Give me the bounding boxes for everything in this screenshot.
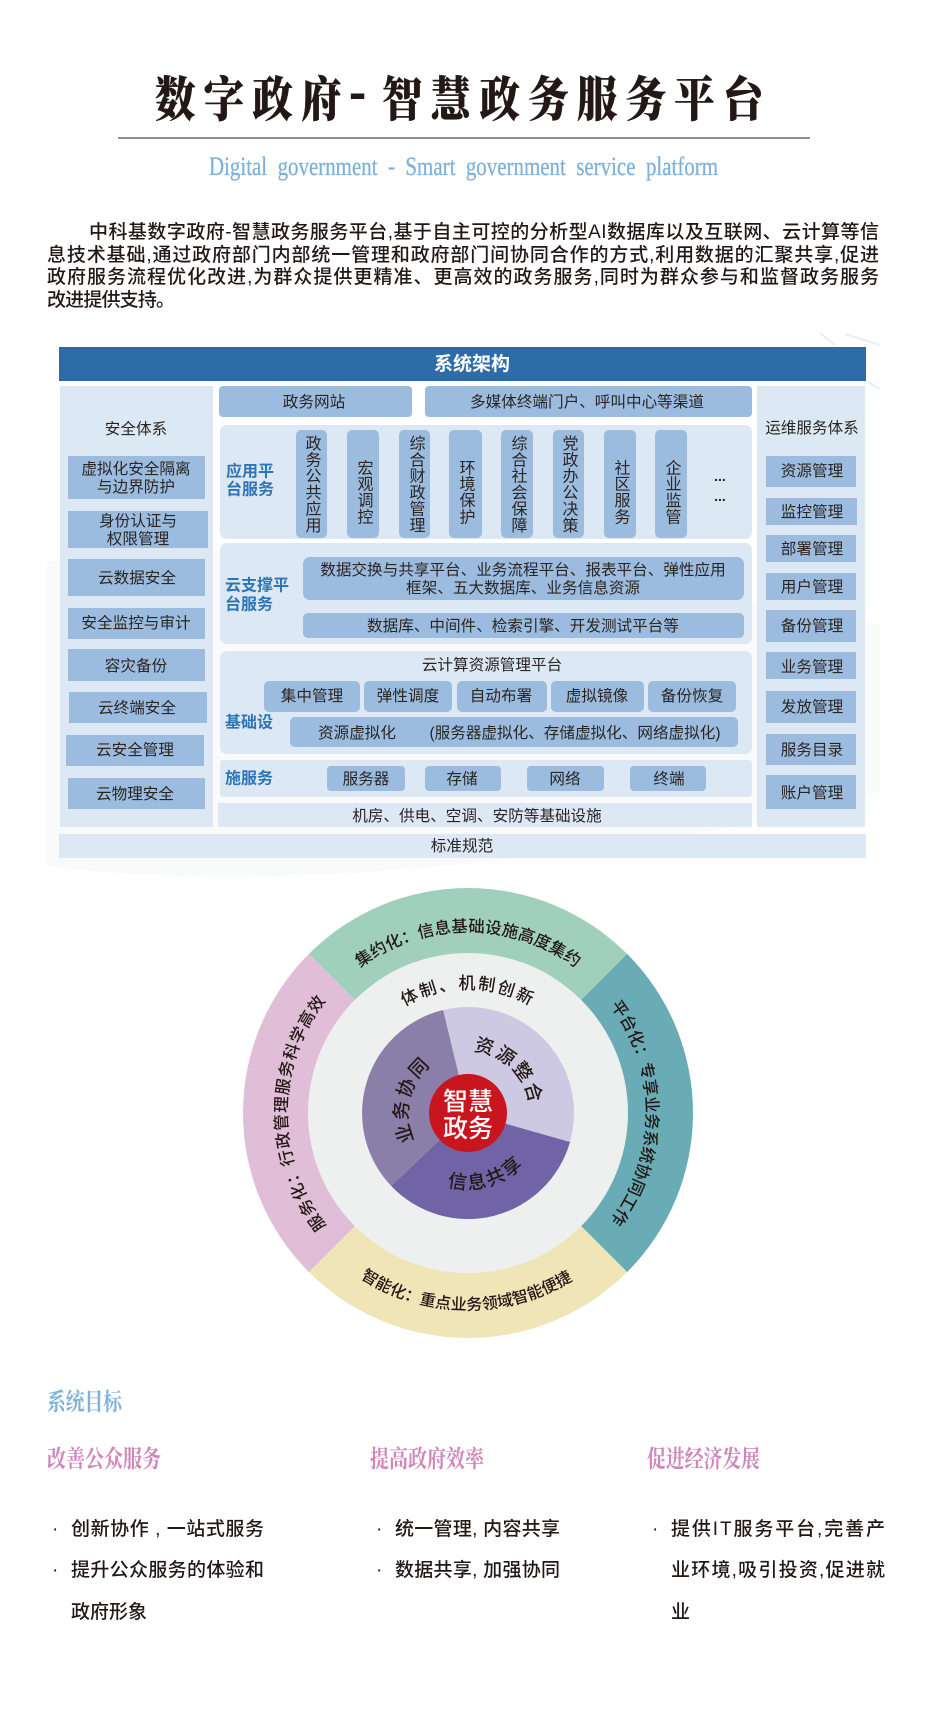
panel: operations services: 账户管理 [781,784,844,802]
panel: application platform services: ... [714,468,726,484]
panel: cloud support platform services: 框架、五大数据库、业务信息资源 [406,579,640,597]
panel: application platform services: 环境保护 [456,459,476,525]
sector: business collaboration: 业务协同 [392,1056,430,1143]
panel: infrastructure services: 自动布署 [470,687,532,705]
standards bar [59,834,866,858]
innovation ring: 体制、机制创新 [401,974,534,1006]
panel: operations services: 监控管理 [781,503,844,521]
column: improve public services: 政府形象 [71,1601,147,1623]
panel: infrastructure services: 网络 [549,769,581,788]
panel: infrastructure services: 服务器 [343,770,390,788]
intro paragraph: 中科基数字政府-智慧政务服务平台,基于自主可控的分析型AI数据库以及互联网、云计算等信 [89,221,879,243]
architecture header [59,347,866,381]
panel: operations services [757,386,865,827]
segment: platform: 平台化：专享业务系统协同工作 [612,999,660,1227]
panel: infrastructure services: 基础设 [225,714,273,732]
panel: application platform services: 台服务 [226,480,274,498]
panel: security system: 与边界防护 [97,478,175,496]
panel: security system: 云数据安全 [98,569,176,587]
innovation ring [308,953,628,1273]
standards bar: 标准规范 [431,837,493,855]
panel: operations services: 部署管理 [781,540,844,558]
panel: infrastructure services: 集中管理 [281,687,344,705]
panel: application platform services: 综合财政管理 [406,435,426,533]
column: improve public services: · [52,1560,58,1581]
column: improve public services: 创新协作 , 一站式服务 [71,1518,264,1540]
panel: application platform services: 综合社会保障 [508,435,528,533]
panel: infrastructure services [220,651,752,797]
panel: operations services: 业务管理 [781,658,844,676]
title: 数字政府 [155,61,350,130]
intro paragraph: 改进提供支持。 [47,289,175,311]
column: improve public services: 改善公众服务 [47,1439,161,1474]
segment: intensive [309,888,627,1000]
panel: application platform services: ... [714,488,726,504]
panel: security system: 云终端安全 [98,699,176,717]
segment: intelligent [309,1226,627,1338]
column: promote economic development: 业 [671,1601,690,1623]
intro paragraph: 政府服务流程优化改进,为群众提供更精准、更高效的政务服务,同时为群众参与和监督政务服务 [47,266,879,288]
column: improve government efficiency: 数据共享, 加强协同 [395,1559,560,1581]
title: 智慧政务服务平台 [382,61,772,130]
column: improve government efficiency: · [376,1560,382,1581]
segment: intensive: 集约化：信息基础设施高度集约 [355,918,581,968]
panel: system architecture [59,347,866,858]
panel: security system: 云物理安全 [96,785,174,803]
panel: application platform services [220,425,752,539]
panel: infrastructure services: 弹性调度 [377,687,439,705]
panel: security system [60,386,213,827]
panel: infrastructure services: 备份恢复 [661,687,724,705]
segment: service [243,954,355,1272]
panel: application platform services: 企业监管 [662,459,682,525]
heading: system goals: 系统目标 [47,1382,124,1417]
column: improve government efficiency: · [376,1519,382,1540]
column: promote economic development: 提供IT服务平台,完善产 [671,1518,885,1540]
centre circle: 政务 [443,1115,493,1143]
panel: operations services: 发放管理 [781,698,844,716]
panel: security system: 安全监控与审计 [81,614,191,632]
base facilities bar [218,803,752,827]
panel: security system: 云安全管理 [96,741,174,759]
column: promote economic development: 促进经济发展 [647,1439,760,1474]
column: improve government efficiency [370,1439,560,1581]
panel: operations services: 服务目录 [781,741,843,759]
intro paragraph [47,221,879,311]
panel: application platform services: 应用平 [226,462,274,480]
panel: infrastructure services: 存储 [446,770,478,788]
panel: security system: 容灾备份 [105,657,168,675]
column: improve public services: 提升公众服务的体验和 [71,1559,264,1581]
column: improve public services [47,1439,264,1623]
column: promote economic development [647,1439,885,1623]
centre circle: 智慧 [443,1088,493,1116]
column: promote economic development: 业环境,吸引投资,促进就 [671,1559,885,1581]
panel: application platform services: 社区服务 [612,459,630,525]
base facilities bar: 机房、供电、空调、安防等基础设施 [352,807,602,825]
panel: infrastructure services: 终端 [653,770,685,788]
sector: resource integration [443,1007,574,1142]
sector: information sharing [391,1124,570,1219]
panel: cloud support platform services: 云支撑平 [225,576,289,594]
panel: operations services: 备份管理 [781,617,844,635]
panel: infrastructure services: 虚拟镜像 [566,686,629,705]
title [155,55,772,130]
panel: operations services: 用户管理 [781,578,844,596]
centre circle [429,1074,507,1152]
panel: operations services: 运维服务体系 [765,419,859,437]
panel: application platform services: 政务公共应用 [302,435,322,534]
column: improve public services: · [52,1519,58,1540]
panel: cloud support platform services: 数据交换与共享平台、业务流程平台、报表平台、弹性应用 [320,560,726,579]
sector: information sharing: 信息共享 [449,1156,522,1191]
panel: security system: 虚拟化安全隔离 [81,460,191,478]
panel: operations services: 资源管理 [781,462,844,480]
panel: infrastructure services: 施服务 [225,768,273,788]
column: improve government efficiency: 统一管理, 内容共享 [395,1518,560,1540]
intro paragraph: 息技术基础,通过政府部门内部统一管理和政府部门间协同合作的方式,利用数据的汇聚共享,促进 [47,243,879,266]
panel: cloud support platform services: 台服务 [225,594,273,614]
channels row [219,386,752,417]
segment: intelligent: 智能化：重点业务领域智能便捷 [362,1268,573,1312]
panel: application platform services: 宏观调控 [354,459,374,525]
title: - [350,55,382,124]
panel: security system: 身份认证与 [99,512,177,530]
panel: cloud support platform services: 数据库、中间件、检索引擎、开发测试平台等 [367,617,679,635]
panel: security system: 权限管理 [107,530,170,548]
sector: business collaboration [362,1010,459,1186]
column: improve government efficiency: 提高政府效率 [370,1439,485,1474]
subtitle: Digital government - Smart government service platform [209,152,718,181]
panel: application platform services: 党政办公决策 [560,435,578,533]
panel: infrastructure services: 资源虚拟化 [318,724,396,742]
sector: resource integration: 资源整合 [474,1036,543,1100]
panel: infrastructure services: 云计算资源管理平台 [422,655,562,674]
panel: infrastructure services: (服务器虚拟化、存储虚拟化、网络虚拟化) [429,723,721,742]
channels row: 政务网站 [283,393,345,411]
panel: security system: 安全体系 [105,420,167,438]
channels row: 多媒体终端门户、呼叫中心等渠道 [470,393,704,411]
segment: service: 服务化：行政管理服务科学高效 [273,994,327,1233]
chart: smart government concentric diagram [243,888,693,1338]
column: promote economic development: · [652,1519,658,1540]
panel: cloud support platform services [220,543,752,644]
architecture header: 系统架构 [434,352,510,375]
segment: platform [581,954,693,1272]
